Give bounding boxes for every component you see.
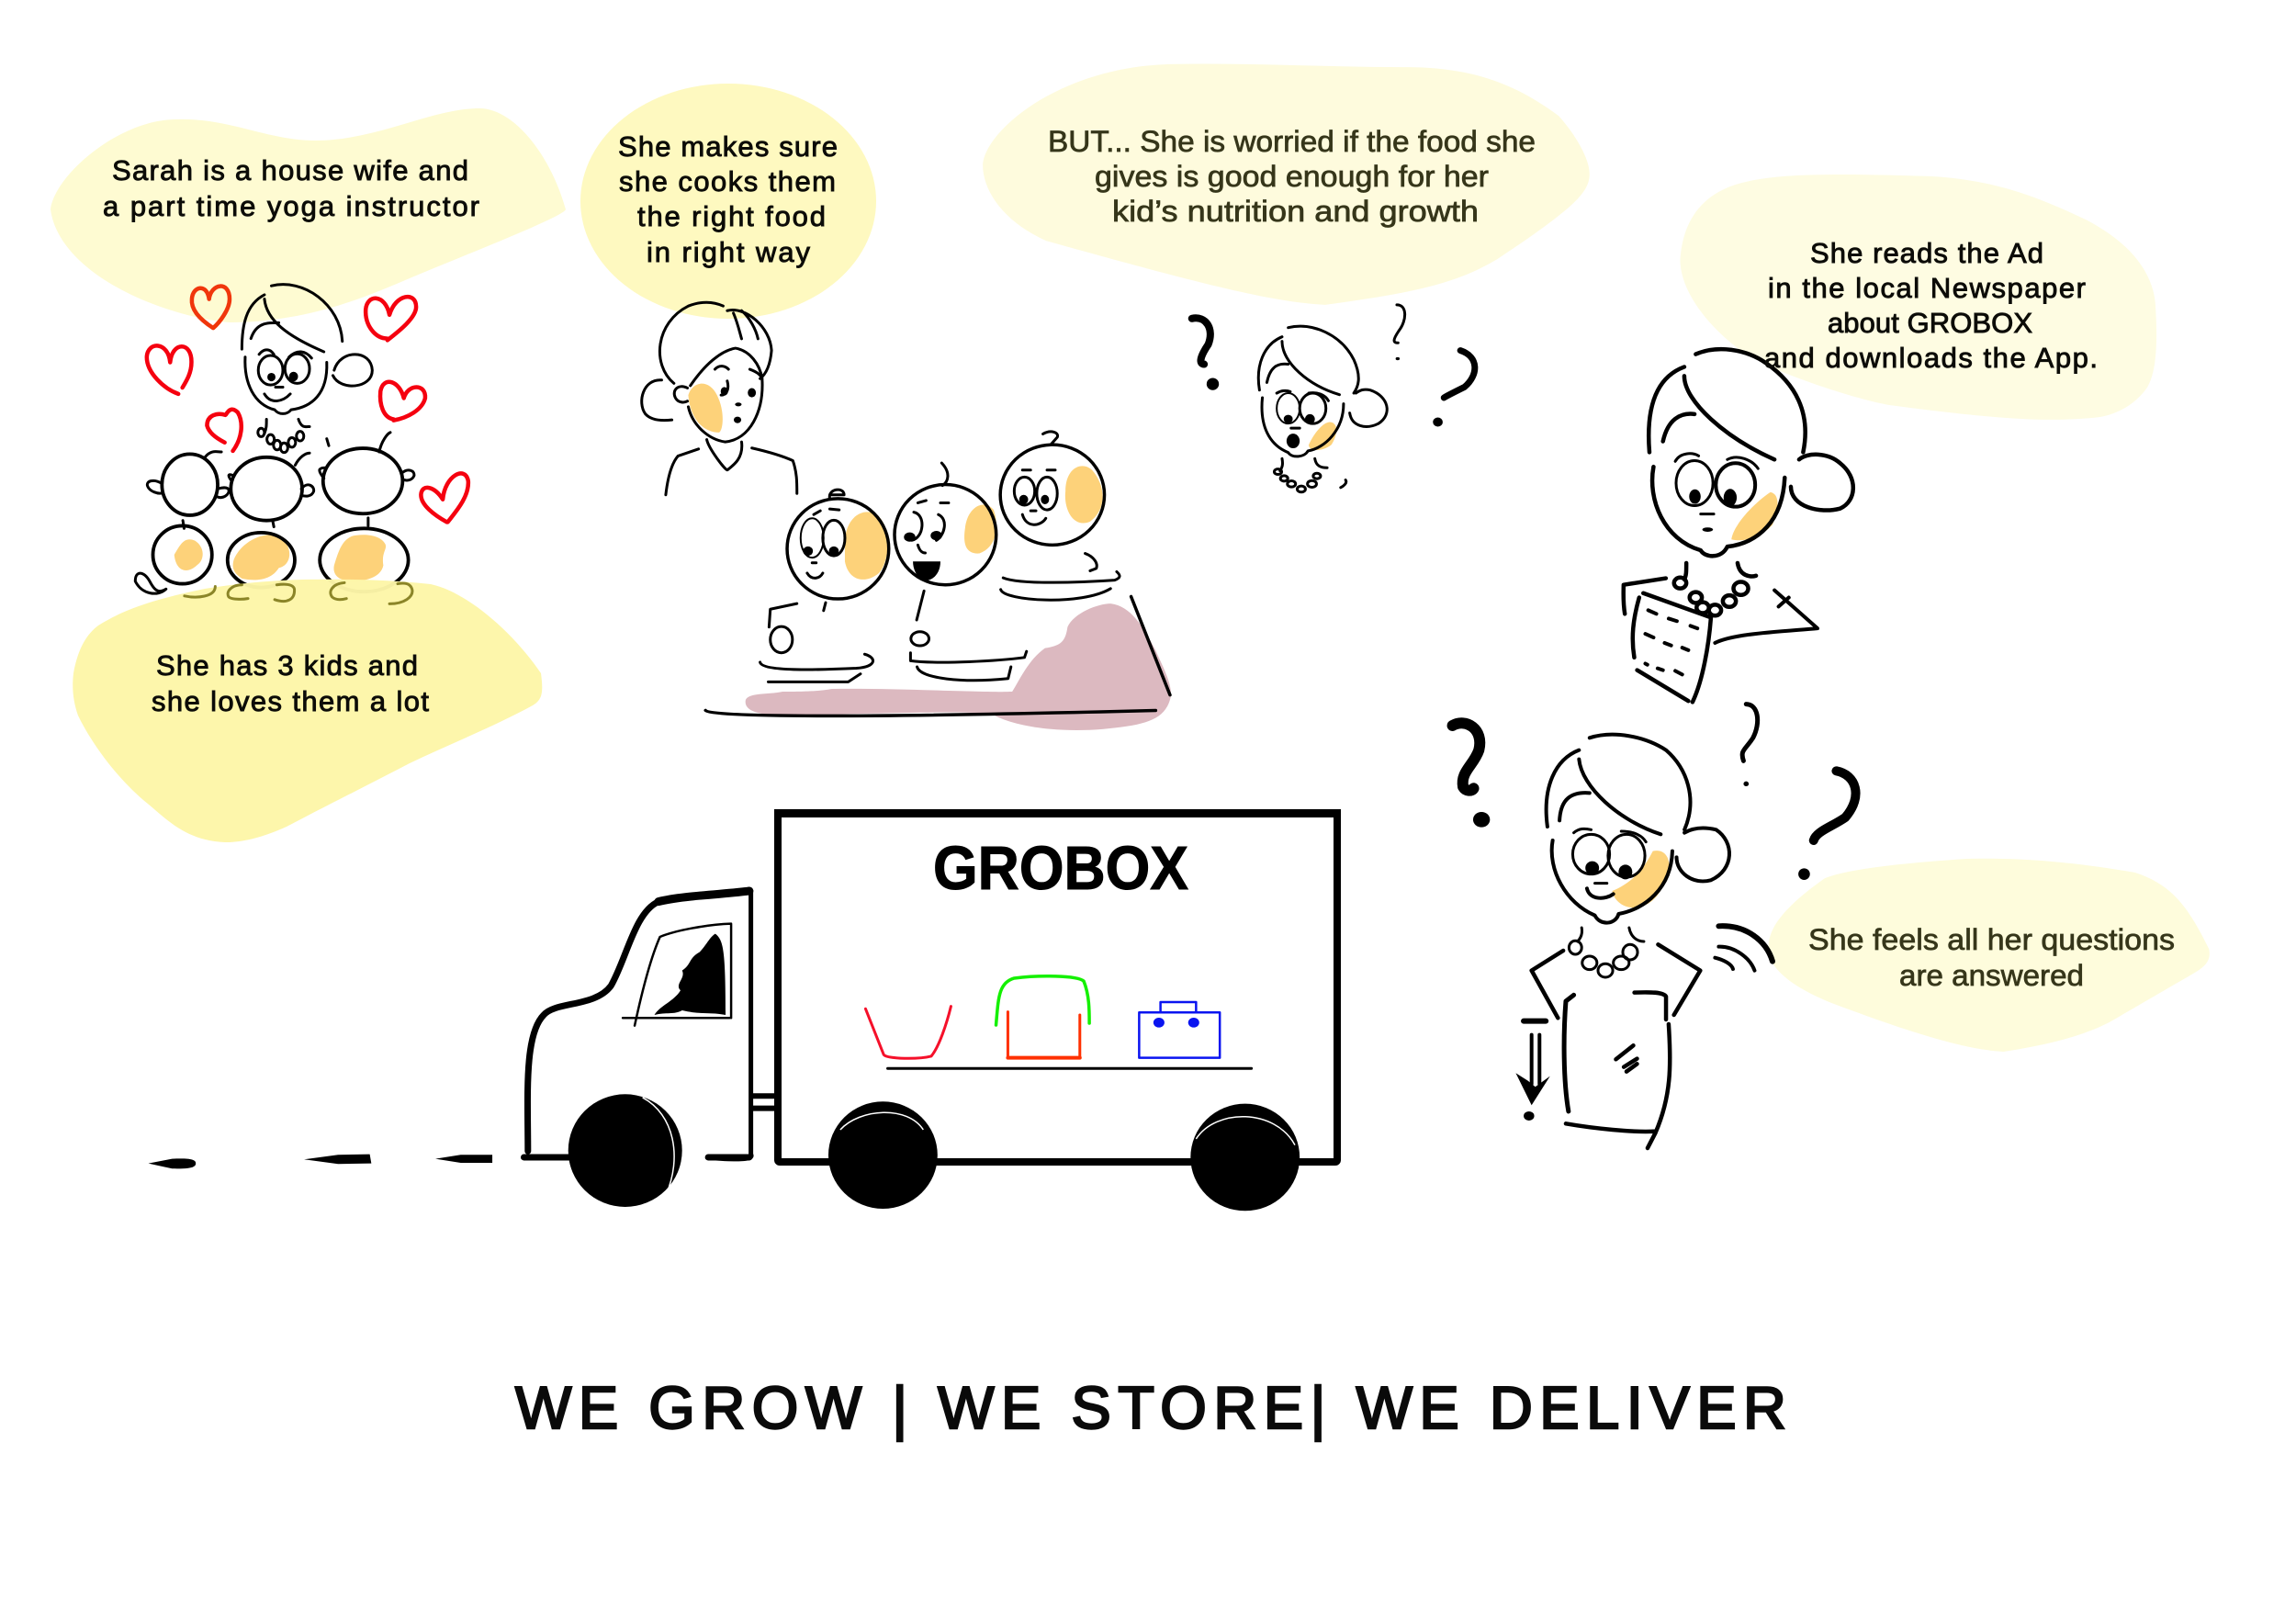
kid 2: [895, 463, 1027, 681]
panel: Sarah and her kids: [51, 108, 566, 842]
text: newspaper ad: in the local Newspaper: [1768, 272, 2086, 304]
text: worry: gives is good enough for her: [1095, 160, 1489, 193]
text: worry: [1048, 125, 1536, 228]
speech blob: Sarah intro: [51, 108, 566, 322]
three kids from behind: [135, 433, 414, 593]
illustration: mother with answers: [1453, 704, 1856, 1148]
dress and arms: [1532, 944, 1700, 1148]
cab outline: [523, 891, 777, 1159]
text: cooking: she cooks them: [619, 165, 836, 197]
mother head and shoulders: [642, 302, 797, 495]
road dashes: [149, 1155, 492, 1168]
text: answered: She feels all her questions: [1808, 923, 2175, 956]
cab window with driver: [623, 924, 731, 1026]
feet seen through the blob: [185, 582, 412, 603]
text: three kids: [152, 649, 429, 717]
table surface: [746, 603, 1171, 730]
text: Sarah intro: [103, 154, 479, 222]
speech blob: answered: [1769, 859, 2210, 1052]
text: cooking: [618, 130, 838, 268]
illustration: mother and kids at the table: [642, 302, 1171, 730]
truck cargo box: [774, 809, 1341, 1162]
kid 3: [1000, 432, 1120, 600]
face and hair: [1649, 349, 1853, 615]
text: answered: [1808, 923, 2175, 992]
illustration: mother with hearts and three kids: [135, 285, 468, 593]
speech blob: worry: [983, 64, 1590, 305]
tagline: WE GROW | WE STORE| WE DELIVER: [515, 1374, 1786, 1441]
text: newspaper ad: and downloads the App.: [1764, 342, 2098, 374]
truck details: [149, 891, 1300, 1211]
text: cooking: in right way: [647, 236, 810, 268]
text: cooking: the right food: [637, 200, 826, 232]
head white fill: [1684, 351, 1806, 459]
panel: she is worried: [983, 64, 1590, 492]
question marks: [1453, 704, 1856, 880]
smiling face: [1547, 735, 1729, 977]
text: three kids: She has 3 kids and: [156, 649, 418, 682]
question marks: [1192, 305, 1475, 426]
text: newspaper ad: about GROBOX: [1828, 307, 2032, 339]
text: answered: are answered: [1899, 959, 2084, 992]
text: Sarah intro: a part time yoga instructor: [103, 190, 479, 222]
text: newspaper ad: [1764, 237, 2098, 374]
panel: her questions are answered: [1453, 704, 2210, 1148]
red hearts: [147, 287, 468, 522]
panel: GROBOX delivery truck: [149, 809, 1341, 1211]
panel: she reads the ad: [1624, 175, 2156, 702]
panel: she cooks the right food: [580, 84, 1171, 730]
text: Sarah intro: Sarah is a house wife and: [112, 154, 468, 186]
text: worry: BUT... She is worried if the food she: [1048, 125, 1536, 158]
speech blob: cooking: [580, 84, 876, 319]
truck brand name: GROBOX: [933, 834, 1188, 903]
mother head: [242, 285, 372, 453]
speech blob: newspaper ad: [1680, 175, 2156, 420]
food boxes on shelf: [865, 976, 1252, 1068]
wheels: [568, 1094, 1300, 1211]
text: newspaper ad: She reads the Ad: [1810, 237, 2043, 269]
text: worry: kid’s nutrition and growth: [1112, 195, 1479, 228]
newspaper and arms: [1624, 579, 1818, 702]
table lines: [705, 596, 1170, 716]
illustration: worried mother with question marks: [1192, 305, 1475, 492]
speech blob: three kids: [73, 580, 542, 842]
illustration: mother reading newspaper: [1624, 349, 1853, 702]
down arrow: [1515, 1021, 1550, 1121]
text: cooking: She makes sure: [618, 130, 838, 163]
kid 1: [760, 490, 889, 682]
sound arcs: [1715, 926, 1773, 971]
text: three kids: she loves them a lot: [152, 685, 429, 717]
worried face: [1258, 326, 1387, 492]
